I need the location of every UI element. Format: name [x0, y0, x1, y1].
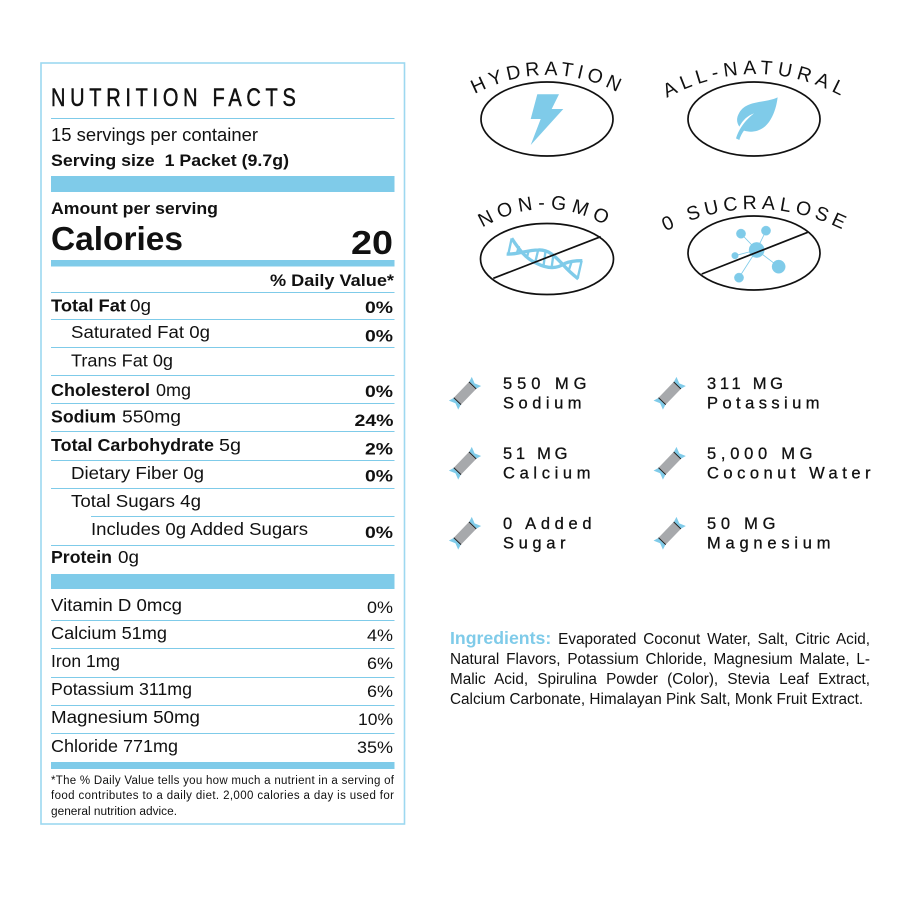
icon: lightning bolt: [531, 94, 563, 145]
nutrient rows: 0g: [130, 296, 151, 316]
calories: Amount per serving: [51, 199, 218, 218]
icon: stick: [449, 377, 481, 410]
stat: coconut water: Coconut Water: [707, 464, 871, 482]
daily value percents: 24%: [354, 411, 394, 430]
panel: nutrition facts: [41, 63, 404, 824]
icon: dna: [507, 238, 582, 279]
nutrient rows: Total Carbohydrate: [51, 435, 214, 455]
calories: [51, 199, 394, 290]
slash: [493, 237, 601, 278]
stat: coconut water: 5,000 MG: [707, 445, 812, 463]
icon: stick: [654, 517, 686, 550]
nutrient rows: Total Sugars 4g: [71, 491, 201, 511]
daily value percents: 0%: [367, 598, 393, 617]
servings: [51, 125, 289, 170]
icon: stick: [654, 377, 686, 410]
icon: stick: [449, 517, 481, 550]
stat: sodium: [503, 375, 586, 412]
footnote: [51, 775, 395, 818]
nutrient rows: Includes 0g Added Sugars: [91, 519, 308, 539]
daily value percents: 10%: [358, 710, 393, 729]
stat: potassium: 311 MG: [707, 375, 783, 393]
footnote: food contributes to a daily diet. 2,000 calories a day is used for: [51, 790, 394, 802]
daily value percents: 35%: [357, 738, 393, 757]
daily value percents: 6%: [367, 654, 393, 673]
ingredients text: Calcium Carbonate, Himalayan Pink Salt, Monk Fruit Extract.: [450, 691, 863, 708]
heading: nutrition facts: NUTRITION FACTS: [51, 84, 296, 112]
footnote: general nutrition advice.: [51, 806, 177, 818]
daily value percents: 0%: [365, 466, 393, 486]
ingredients text: Malic Acid, Spirulina Powder (Color), Stevia Leaf Extract,: [450, 671, 870, 688]
calories: Calories: [51, 220, 183, 257]
daily value percents: 0%: [365, 298, 393, 317]
stat: potassium: Potassium: [707, 394, 820, 412]
nutrient rows: Iron 1mg: [51, 651, 120, 671]
ingredients text: Natural Flavors, Potassium Chloride, Magnesium Malate, L-: [450, 651, 870, 668]
nutrient rows: Calcium 51mg: [51, 623, 167, 643]
stat: added sugar: Sugar: [503, 534, 566, 552]
nutrient rows: Dietary Fiber 0g: [71, 463, 204, 483]
stat: magnesium: Magnesium: [707, 534, 830, 552]
calories: % Daily Value*: [270, 271, 394, 290]
nutrient rows: Protein: [51, 547, 112, 567]
nutrient rows: Magnesium 50mg: [51, 707, 200, 727]
stat: potassium: [707, 375, 820, 412]
icon: molecule: [732, 226, 785, 282]
servings: 15 servings per container: [51, 125, 258, 145]
badge: hydration: HYDRATION: [470, 62, 622, 94]
nutrient rows: Trans Fat 0g: [71, 350, 173, 370]
badge: all-natural: ALL-NATURAL: [666, 60, 841, 98]
stat: added sugar: [503, 515, 592, 552]
nutrient rows: 0g: [118, 547, 139, 567]
stat: coconut water: [707, 445, 871, 482]
icon: leaf: [736, 97, 778, 140]
stat list: [449, 375, 871, 552]
nutrient rows: 0mg: [156, 380, 191, 400]
stat: calcium: 51 MG: [503, 445, 568, 463]
stat: calcium: [503, 445, 590, 482]
stat: magnesium: [707, 515, 830, 552]
nutrient rows: Cholesterol: [51, 380, 150, 400]
badge: hydration: [470, 62, 622, 157]
footnote: *The % Daily Value tells you how much a nutrient in a serving of: [51, 775, 395, 787]
row lines: [51, 118, 394, 734]
badge: 0 sucralose: [662, 196, 847, 291]
badge: all-natural: [666, 60, 841, 157]
stat: calcium: Calcium: [503, 464, 590, 482]
divider bars: [51, 176, 394, 769]
stat: added sugar: 0 Added: [503, 515, 592, 533]
icon: stick: [449, 447, 481, 480]
nutrient rows: Chloride 771mg: [51, 736, 178, 756]
daily value percents: 0%: [365, 523, 393, 542]
stat: sodium: Sodium: [503, 394, 582, 412]
calories: 20: [351, 224, 393, 261]
nutrient rows: 550mg: [122, 406, 181, 426]
daily value percents: [354, 298, 394, 757]
daily value percents: 4%: [367, 626, 393, 645]
stat: magnesium: 50 MG: [707, 515, 776, 533]
stat: sodium: 550 MG: [503, 375, 586, 393]
badge: non-gmo: [478, 196, 614, 296]
nutrient rows: Sodium: [51, 406, 116, 426]
ingredients text: Ingredients: Evaporated Coconut Water, Salt, Citric Acid,: [450, 628, 870, 648]
badge: 0 sucralose: 0 SUCRALOSE: [662, 196, 847, 230]
slash: [702, 232, 808, 274]
daily value percents: 0%: [365, 382, 393, 401]
nutrient rows: 5g: [219, 435, 241, 455]
nutrient rows: Potassium 311mg: [51, 679, 192, 699]
nutrient rows: Saturated Fat 0g: [71, 322, 210, 342]
icon: stick: [654, 447, 686, 480]
badge: non-gmo: NON-GMO: [478, 196, 608, 227]
nutrient rows: [51, 296, 308, 756]
ingredients text: [450, 628, 870, 708]
daily value percents: 0%: [365, 326, 393, 346]
daily value percents: 2%: [365, 440, 393, 458]
nutrient rows: Vitamin D 0mcg: [51, 595, 182, 615]
daily value percents: 6%: [367, 682, 393, 701]
servings: Serving size 1 Packet (9.7g): [51, 151, 289, 170]
nutrient rows: Total Fat: [51, 296, 126, 316]
